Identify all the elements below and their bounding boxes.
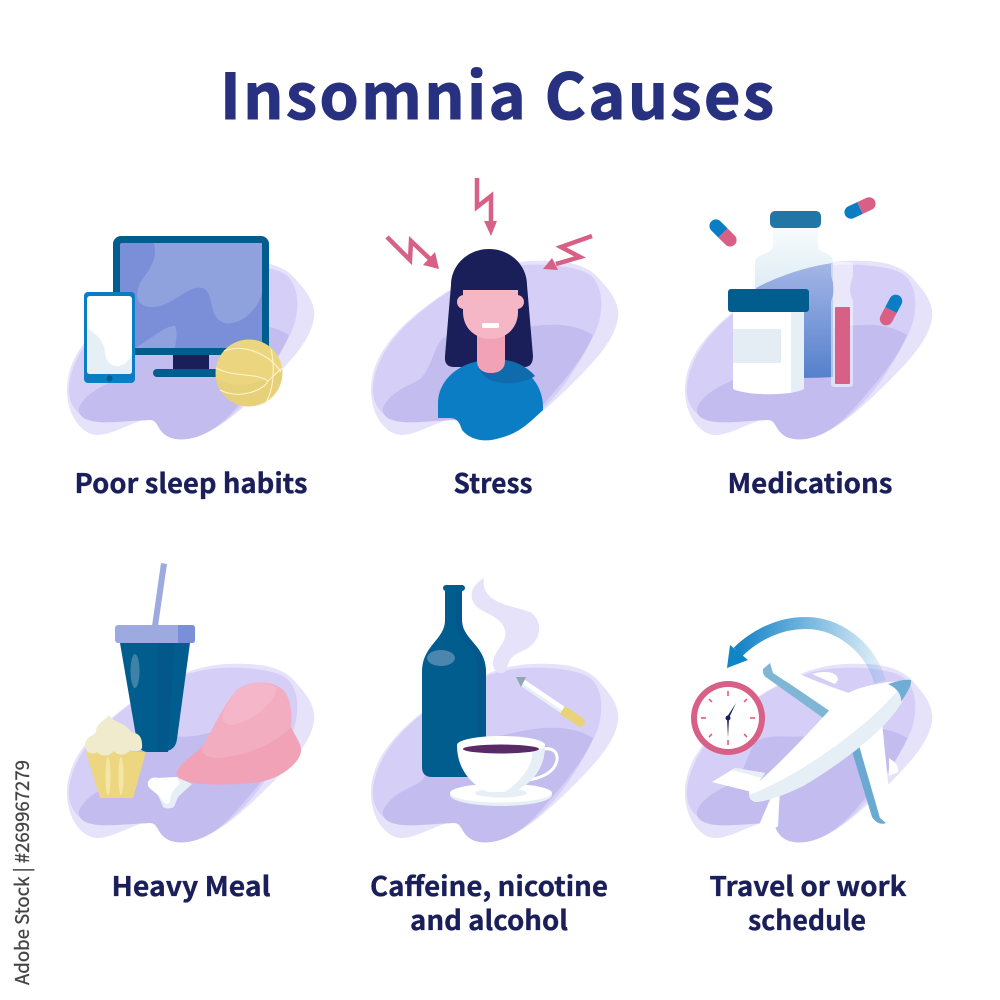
label: medications: Medications: [728, 462, 892, 501]
icon: phone: [84, 292, 135, 383]
icon: woman: [438, 249, 543, 440]
stock id text: Adobe Stock | #269967279: [8, 760, 35, 985]
background blob: [371, 261, 618, 439]
background blob: [371, 664, 618, 842]
background blob: [685, 664, 932, 842]
icon: vial: [831, 262, 853, 387]
icon: jar: [728, 289, 809, 394]
panel: travel or work schedule: [685, 623, 932, 842]
icon: monitor: [113, 236, 269, 377]
background blob: [67, 664, 314, 842]
label: stress: Stress: [454, 462, 532, 501]
title: Insomnia Causes: [220, 47, 774, 138]
background blob: [67, 261, 314, 439]
icon: large bottle: [755, 211, 833, 378]
icon: stress bolts: [387, 178, 592, 270]
label: caffeine, nicotine and alcohol: Caffeine, nicotine: [370, 865, 608, 904]
icon: drink cup: [115, 563, 195, 752]
icon: chicken leg: [148, 682, 301, 808]
icon: airplane: [712, 663, 911, 834]
icon: coffee cup: [450, 736, 557, 806]
panel: stress: [371, 178, 618, 440]
label: poor sleep habits: Poor sleep habits: [74, 462, 308, 501]
icon: cigarette: [516, 677, 585, 727]
label: caffeine, nicotine and alcohol: and alcohol: [410, 899, 568, 938]
icon: pills: [707, 195, 904, 328]
label: travel or work schedule: Travel or work: [710, 865, 907, 904]
panel: heavy meal: [67, 563, 314, 842]
panel: medications: [685, 195, 932, 439]
background blob: [685, 261, 932, 439]
icon: curved arrow: [727, 623, 880, 682]
icon: basketball: [216, 340, 282, 406]
icon: wine bottle: [422, 585, 486, 777]
icon: clock: [691, 681, 765, 755]
label: travel or work schedule: [710, 865, 907, 938]
panel: poor sleep habits: [67, 236, 314, 439]
label: travel or work schedule: schedule: [748, 899, 866, 938]
label: heavy meal: Heavy Meal: [112, 865, 270, 904]
panel: caffeine, nicotine and alcohol: [371, 578, 618, 842]
icon: smoke: [472, 578, 539, 673]
label: caffeine, nicotine and alcohol: [370, 865, 608, 938]
icon: cupcake: [85, 715, 146, 798]
